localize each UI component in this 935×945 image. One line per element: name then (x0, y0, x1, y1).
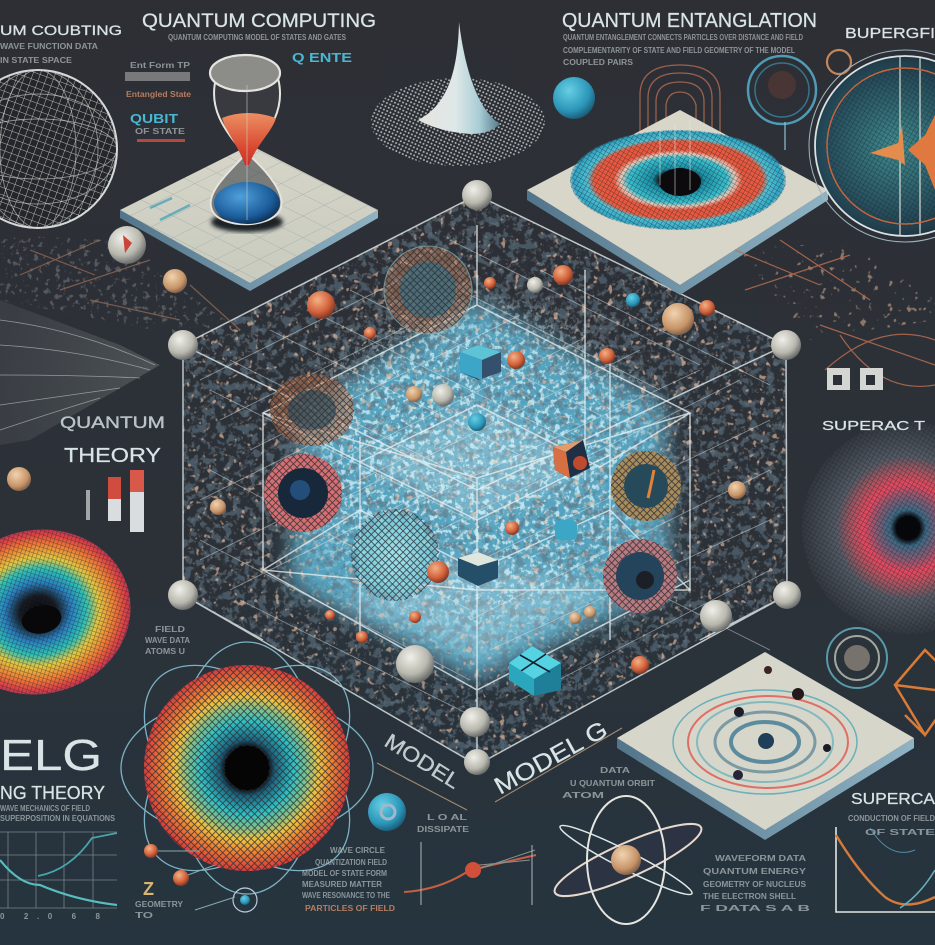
text: entanglation body (563, 33, 803, 67)
text: model note: L O AL (427, 813, 467, 822)
ring icon: blue circle (748, 56, 816, 150)
text: mid left note: FIELD (155, 625, 185, 634)
left rainbow disc (0, 512, 146, 712)
text: centre lower body: QUANTIZATION FIELD (315, 858, 387, 867)
text: atom right body: WAVEFORM DATA (715, 854, 806, 863)
text: left caption 2: IN STATE SPACE (0, 56, 73, 65)
chart: bottom right (836, 827, 935, 912)
text: left note block (125, 61, 192, 99)
scatter: upper right web (735, 240, 935, 386)
radar circle (809, 50, 935, 243)
node: lower cream (460, 707, 490, 737)
node: large cream (396, 645, 434, 683)
rainbow ripple (570, 130, 786, 230)
text: z label: TO (135, 911, 153, 920)
node: frame right bottom (773, 581, 801, 609)
title: quantum theory (60, 413, 165, 467)
badge: cyan (368, 793, 406, 831)
text: centre lower body: WAVE RESONANCE TO THE (302, 891, 391, 900)
cube: large cyan (509, 646, 561, 696)
mesh ring: lower right (603, 539, 677, 613)
guide line under model left (377, 763, 467, 810)
orb: grey small (163, 269, 187, 293)
lattice dark texture (183, 195, 787, 765)
node: frame top (462, 180, 492, 210)
petal outlines (107, 628, 387, 908)
text: supercapacitor body (848, 814, 935, 837)
lattice dim frame texture (183, 195, 787, 765)
text: mid left note (145, 625, 190, 656)
text: atom right body: GEOMETRY OF NUCLEUS (703, 880, 807, 889)
orb: blue planet (553, 77, 595, 119)
title: quantum entanglation: QUANTUM ENTANGLATION (562, 10, 817, 32)
mesh ring: left red (264, 454, 342, 532)
text: string theory body: WAVE MECHANICS OF FIELD (0, 804, 90, 813)
atom (548, 796, 708, 924)
slab: orbit plate (617, 652, 914, 840)
ring icon: lower right (827, 628, 887, 688)
text: centre lower body: MEASURED MATTER (302, 880, 382, 889)
icon: hourglass (210, 55, 283, 232)
text: atom right body: QUANTUM ENERGY (703, 867, 807, 876)
coloured dots (144, 665, 350, 871)
text: supercapacitor body: OF STATE (865, 828, 935, 837)
text: atom right body (700, 854, 810, 913)
text: entanglation body: COUPLED PAIRS (563, 58, 634, 67)
ring icon: small orange (827, 50, 851, 74)
wire sphere (0, 70, 117, 228)
label: model g: MODEL G (490, 716, 612, 800)
text: atom upper body (562, 766, 655, 800)
mesh ring: right gold (611, 451, 681, 521)
text: cyan block: QUBIT (130, 111, 178, 126)
lattice icon: orange (895, 650, 935, 735)
central lattice diagram (183, 195, 787, 765)
cube: orange (553, 440, 590, 478)
chart: bottom left: 0 2.0 6 8 (0, 912, 101, 921)
mesh ring: upper centre (384, 246, 472, 334)
text: left note block: Ent Form TP (130, 61, 191, 70)
orb: tan right (662, 303, 694, 335)
text: atom upper body: U QUANTUM ORBIT (570, 779, 655, 788)
text: z label (135, 879, 184, 920)
title: quantum theory: THEORY (64, 445, 161, 467)
text: atom right body: F DATA S A B (700, 904, 810, 913)
text: centre lower body: PARTICLES OF FIELD (305, 904, 395, 913)
cube: cyan upper (460, 345, 501, 380)
blocks: right white cubes (827, 368, 883, 390)
scattered detail: upper left (0, 235, 240, 335)
lattice warm particles (183, 195, 787, 765)
title: string theory: NG THEORY (0, 783, 105, 803)
orbs (7, 180, 801, 775)
text: left note block: Entangled State (126, 90, 192, 99)
text: centre lower body: WAVE CIRCLE (330, 846, 386, 855)
inner cube lines (263, 225, 690, 765)
text: entanglation body: COMPLEMENTARITY OF STATE AND FIELD GEOMETRY OF THE MODEL (563, 46, 795, 55)
text: model note: DISSIPATE (417, 825, 470, 834)
title: left clipped: UM COUBTING (0, 22, 122, 38)
bright cross lines (263, 405, 690, 590)
mesh ring: lower cyan (351, 509, 439, 601)
text: z label: GEOMETRY (135, 900, 184, 909)
text: entanglation body: QUANTUM ENTANGLEMENT CONNECTS PARTICLES OVER DISTANCE AND FIELD (563, 33, 803, 42)
chart: bottom left (0, 832, 117, 921)
lattice glow core (290, 300, 670, 680)
arches above slab (640, 65, 720, 135)
node: frame left bottom (168, 580, 198, 610)
text: atom upper body: DATA (600, 766, 630, 775)
slab: quantum entanglation (527, 110, 828, 295)
text: atom right body: THE ELECTRON SHELL (703, 892, 796, 901)
right disc: pink (802, 422, 935, 634)
outer frame lines (183, 195, 787, 765)
text: mid left note: WAVE DATA (145, 636, 190, 645)
cone (418, 22, 500, 134)
text: cyan block (130, 111, 186, 142)
lattice light texture (265, 275, 695, 665)
lattice white haze (340, 405, 620, 660)
text: z label: Z (143, 879, 154, 899)
subtitle: quantum computing: QUANTUM COMPUTING MODEL OF STATES AND GATES (168, 33, 347, 42)
orbit rings (673, 690, 857, 794)
text: centre lower body: MODEL OF STATE FORM (302, 869, 387, 878)
text: cyan block: OF STATE (135, 127, 186, 136)
node: frame left top (168, 330, 198, 360)
title: quantum computing: QUANTUM COMPUTING (142, 11, 376, 32)
guide line under model g (495, 728, 622, 802)
bars: quantum theory (86, 470, 144, 532)
text: left caption: WAVE FUNCTION DATA (0, 42, 98, 51)
cube: pale lower (458, 552, 498, 586)
node: frame bottom (464, 749, 490, 775)
orb: tan left (7, 467, 31, 491)
text: centre lower body (302, 846, 395, 913)
scatter: upper left connectors (20, 240, 240, 330)
title: superac: SUPERAC T (822, 418, 925, 433)
dotted disc (371, 78, 545, 166)
title: superconductivity clipped: BUPERGFI (845, 25, 935, 42)
node: frame right top (771, 330, 801, 360)
text: model note (417, 813, 470, 834)
orb: orange left (307, 291, 335, 319)
text: cyan upper centre: Q ENTE (292, 50, 352, 65)
text: string theory body: SUPERPOSITION IN EQUATIONS (0, 814, 116, 823)
scattered detail: upper right (735, 245, 935, 340)
mesh fan: left (0, 300, 160, 445)
text: string theory body (0, 804, 116, 823)
lattice grid (200, 240, 770, 715)
mesh ring: left warm (270, 374, 354, 446)
cube: small cyan (555, 520, 577, 540)
cone on dotted disc (371, 22, 545, 166)
label: model left: MODEL (380, 730, 464, 794)
small orbs: lower left (144, 844, 257, 912)
chart: mini lower centre (404, 842, 536, 905)
title: model g clipped: ELG (0, 731, 102, 780)
title: supercapacitor clipped: SUPERCA (851, 791, 935, 808)
title: quantum theory: QUANTUM (60, 413, 165, 432)
slab: quantum computing (120, 145, 378, 291)
big rainbow disc (107, 628, 387, 908)
text: atom upper body: ATOM (562, 791, 605, 800)
text: mid left note: ATOMS U (145, 647, 185, 656)
orb: grey blue (108, 226, 146, 264)
